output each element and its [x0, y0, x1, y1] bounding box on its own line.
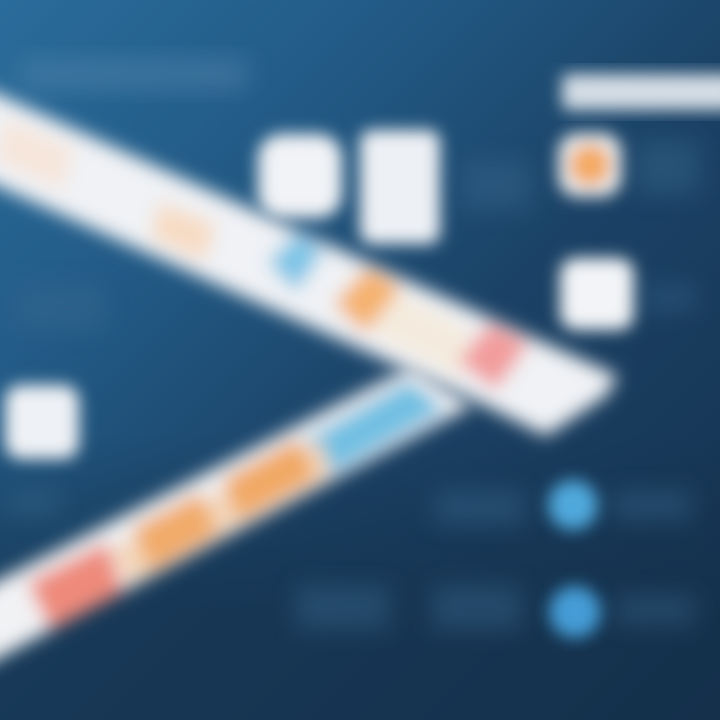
- segment: coral: [28, 542, 124, 630]
- icon: white tile left: [5, 385, 79, 459]
- segment: orange: [334, 266, 402, 334]
- icon: blue circle lower: [549, 586, 601, 638]
- segment: blue: [268, 232, 324, 292]
- segment: blue: [305, 380, 445, 480]
- icon: orange circle on white tile: [558, 133, 622, 197]
- lower diagonal band: [0, 366, 472, 668]
- segment: pale peach: [0, 118, 75, 190]
- faint text blocks: [10, 140, 700, 630]
- icon: white tile right: [560, 258, 634, 330]
- heading placeholder: [18, 58, 248, 90]
- segment: cream: [375, 285, 470, 378]
- segment: coral: [458, 322, 530, 390]
- card: tall document icon: [360, 130, 440, 244]
- icon: blue circle upper: [548, 480, 598, 530]
- segment: orange: [222, 438, 316, 520]
- segment: orange 2: [132, 492, 218, 572]
- right column heading bar: [562, 74, 720, 110]
- segment: peach gap: [110, 440, 332, 586]
- upper diagonal band: [0, 86, 618, 436]
- card: left document icon: [258, 134, 342, 218]
- segment: peach: [150, 202, 216, 262]
